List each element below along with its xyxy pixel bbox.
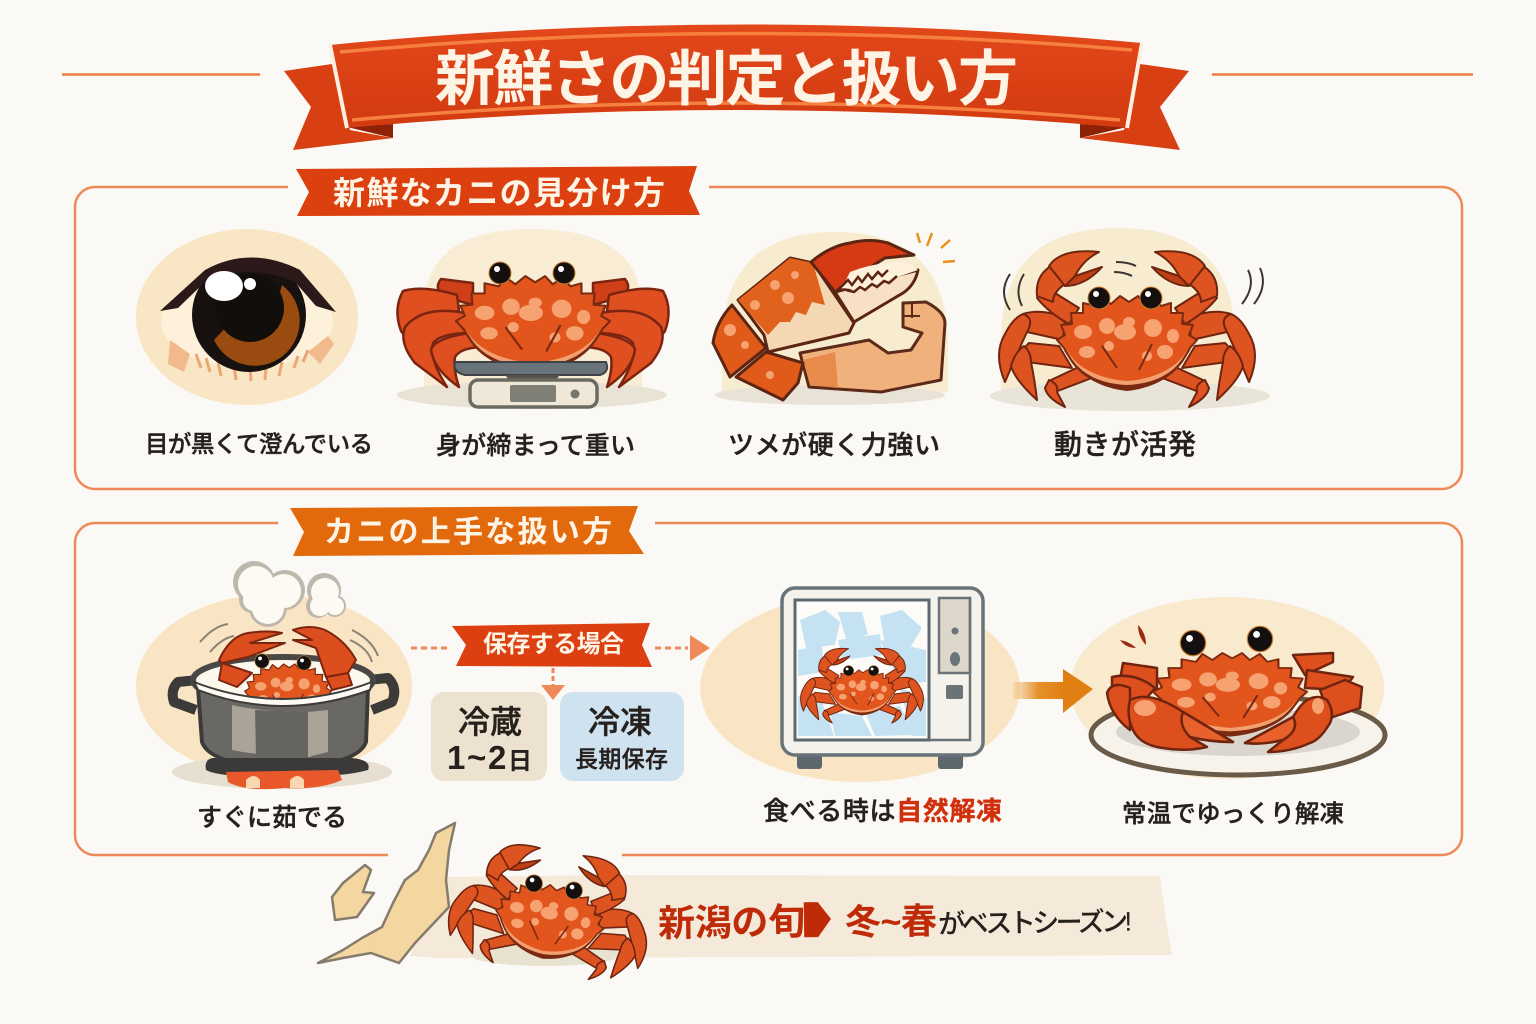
title ribbon [62, 24, 1473, 150]
label: slow thaw: 常温でゆっくり解凍 [1122, 800, 1344, 828]
ribbon tail right [1080, 64, 1189, 150]
panel: how to spot fresh crab [75, 166, 1462, 489]
pointer [804, 902, 831, 937]
dotted arrow down [541, 668, 565, 700]
ribbon tail left [284, 64, 393, 150]
season text: 冬~春 [845, 900, 937, 943]
icon: strong claw and arm [713, 232, 955, 405]
card: freeze [560, 692, 684, 781]
banner: how to spot: 新鮮なカニの見分け方 [333, 175, 665, 211]
card: freeze: 冷凍 [588, 704, 652, 740]
label: boil: すぐに茹でる [197, 804, 347, 832]
season text: 新潟の旬 [658, 901, 805, 944]
crab in pot [219, 627, 356, 723]
label: eye: 目が黒くて澄んでいる [145, 431, 373, 457]
icon: lively crab [990, 228, 1270, 411]
card: refrigerate: 1~2日 [447, 739, 532, 776]
pot handles [173, 678, 394, 710]
title: 新鮮さの判定と扱い方 [435, 46, 1018, 113]
banner: handling: カニの上手な扱い方 [324, 516, 612, 549]
banner: handling [290, 506, 644, 556]
icon: crab in freezer [700, 588, 1020, 782]
label: natural thaw: 食べる時は自然解凍 [763, 796, 1002, 826]
pot body [198, 688, 368, 768]
card: freeze: 長期保存 [575, 746, 668, 772]
steam [233, 561, 346, 627]
arm [800, 302, 945, 392]
storage flow [411, 623, 710, 781]
season text: がベストシーズン! [938, 907, 1132, 939]
label: firm flesh: 身が締まって重い [436, 432, 635, 460]
dotted arrow right [411, 635, 710, 661]
arrow to plate [1013, 669, 1093, 713]
icon: footer crab [442, 834, 660, 988]
card: refrigerate [431, 692, 547, 781]
panel: handling crab [75, 506, 1462, 855]
banner: storing: 保存する場合 [483, 631, 624, 658]
banner: storing [452, 623, 652, 667]
burner [206, 758, 369, 776]
icon: crab on plate [1070, 597, 1385, 779]
banner: how to spot [296, 166, 700, 216]
footer: Niigata season [318, 823, 1172, 988]
plate [1091, 695, 1385, 775]
card: refrigerate: 冷蔵 [458, 704, 522, 740]
icon: crab eye [136, 229, 358, 405]
claw [738, 258, 854, 352]
icon: heavy crab on scale [397, 229, 669, 409]
label: active: 動きが活発 [1054, 429, 1196, 460]
label: hard claws: ツメが硬く力強い [728, 430, 940, 460]
season text [658, 897, 1132, 945]
icon: Niigata map [318, 823, 455, 963]
brush strip [410, 875, 1172, 958]
ribbon folds [347, 124, 1127, 138]
icon: boiling pot [136, 561, 412, 789]
ribbon main band [330, 24, 1142, 128]
